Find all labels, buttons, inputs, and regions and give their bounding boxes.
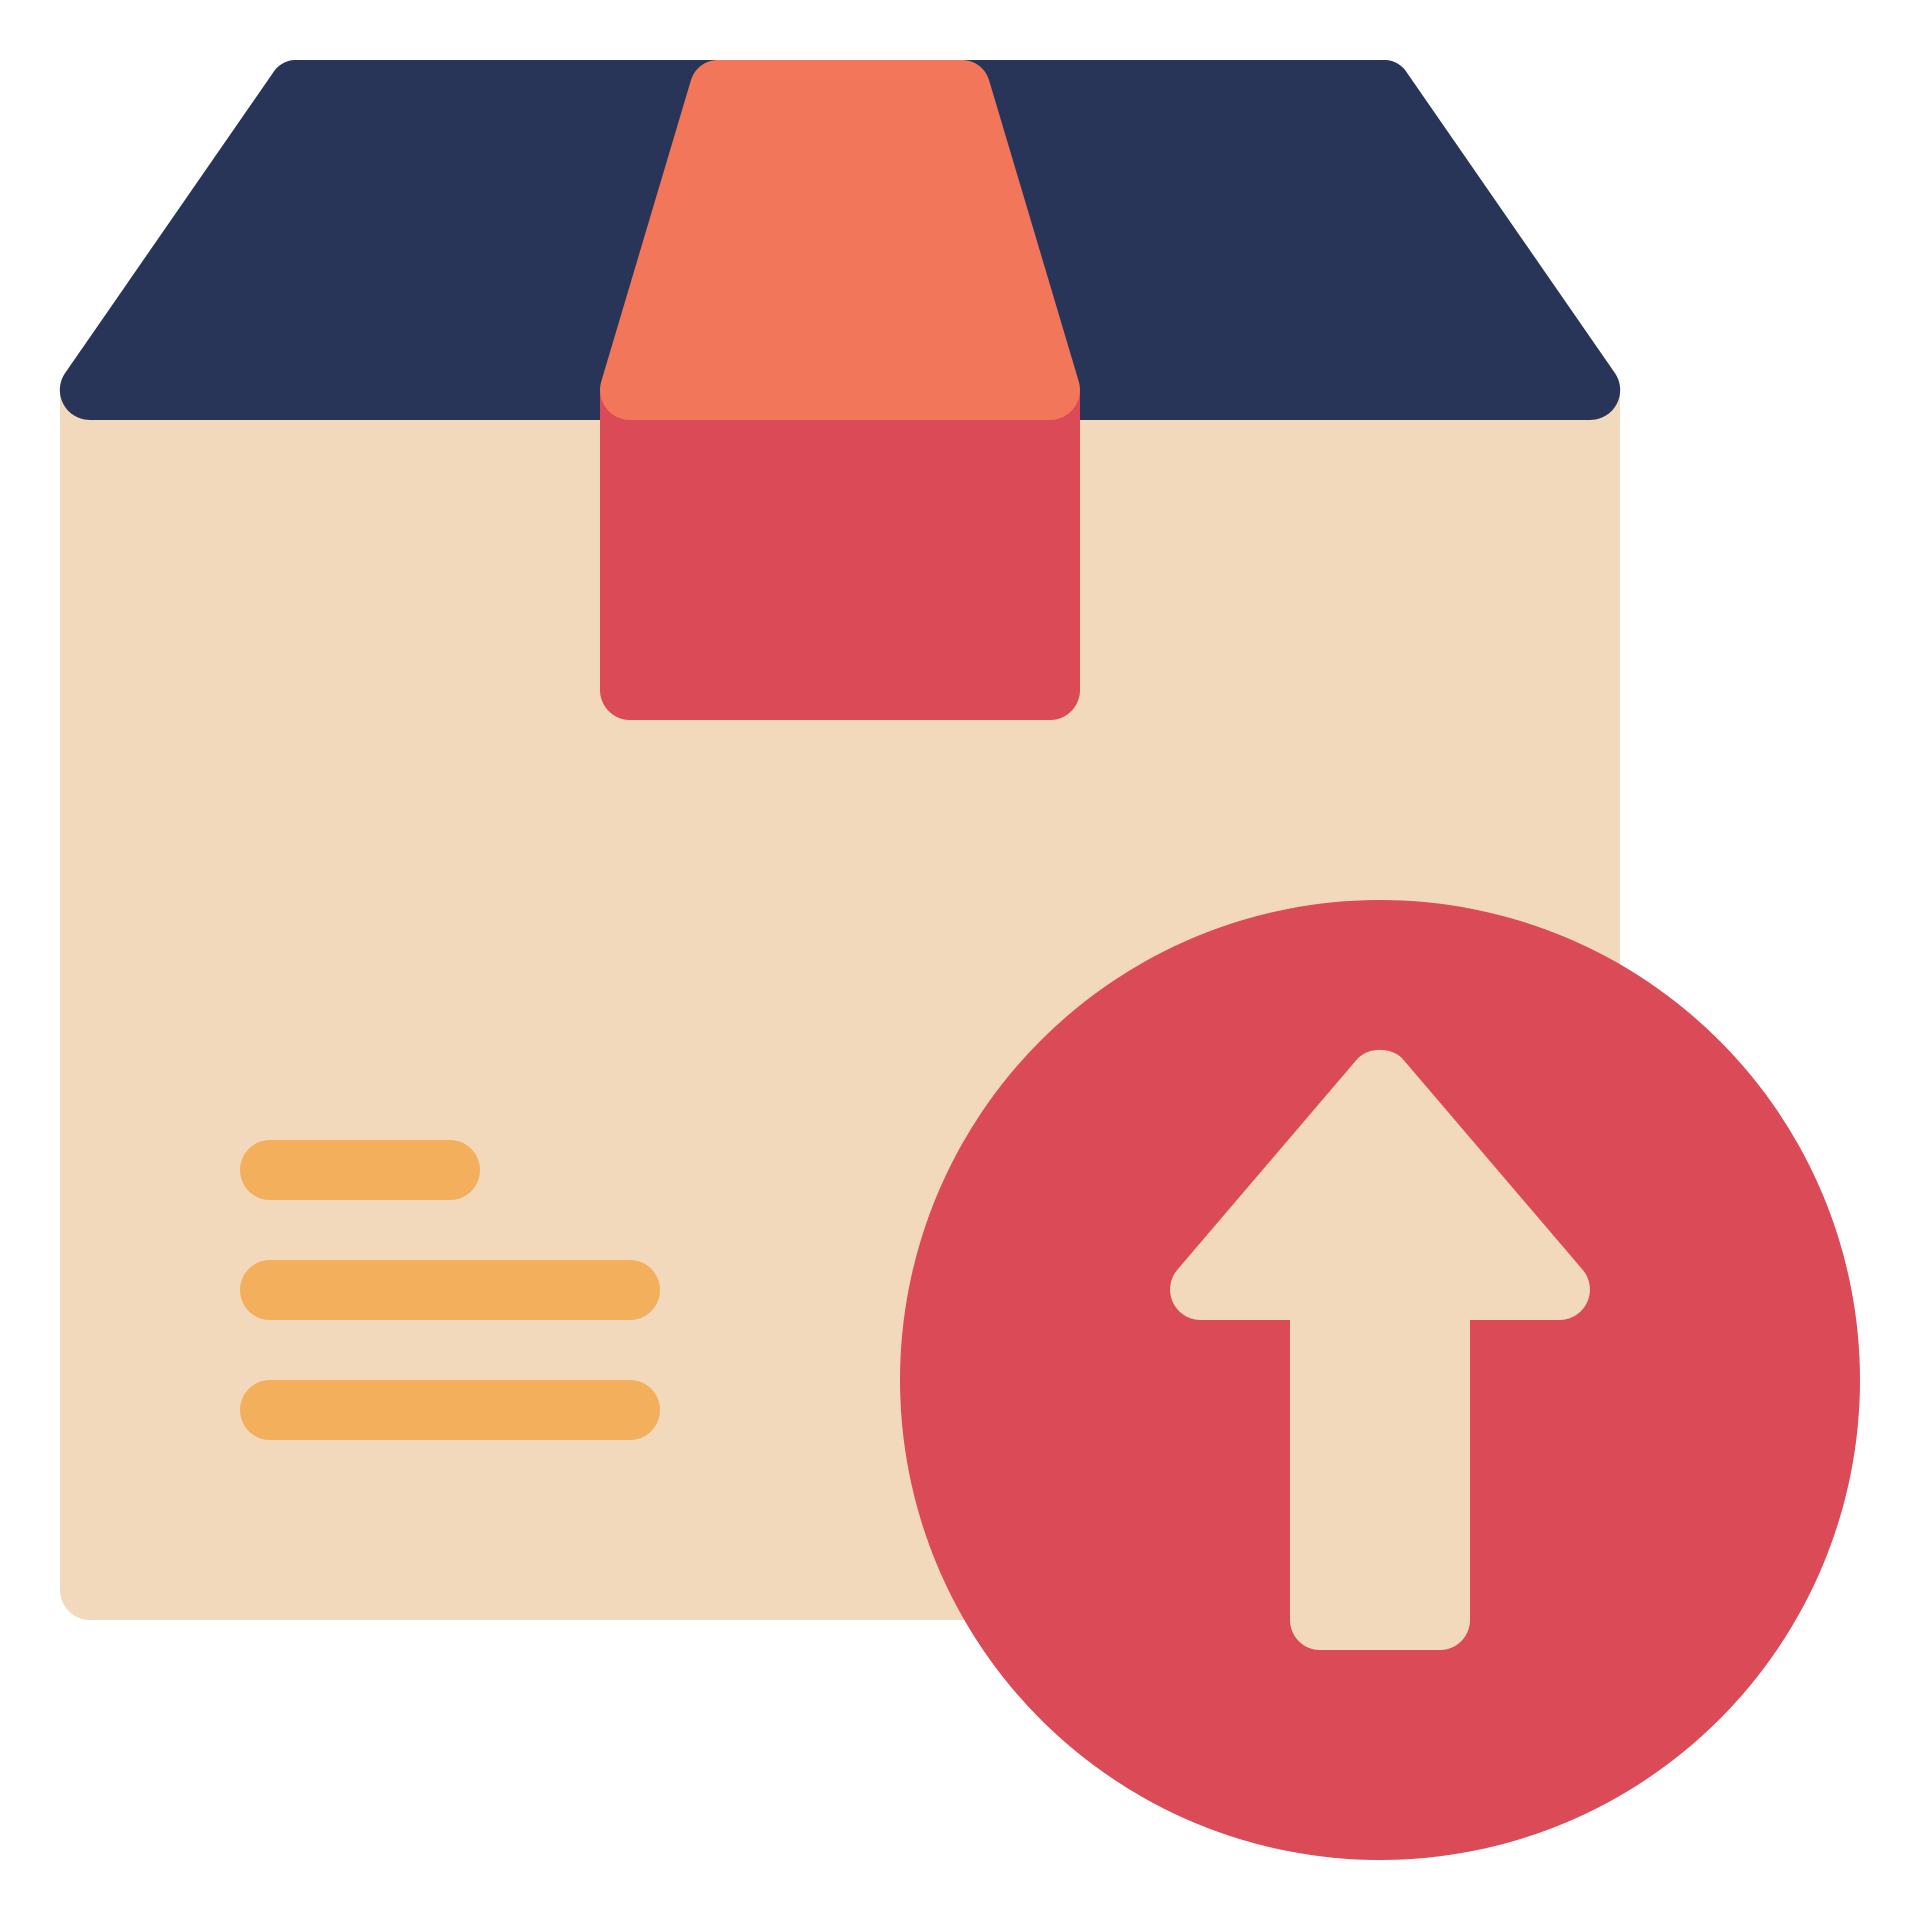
label line 1 bbox=[240, 1140, 480, 1200]
upload badge circle bbox=[900, 900, 1860, 1860]
label lines bbox=[240, 1140, 660, 1440]
box body bbox=[60, 390, 1620, 1620]
label line 3 bbox=[240, 1380, 660, 1440]
label line 2 bbox=[240, 1260, 660, 1320]
icon: up arrow bbox=[1170, 1050, 1590, 1650]
box lid bbox=[60, 60, 1620, 420]
packing tape: front strip bbox=[600, 390, 1080, 720]
packing tape: lid strip bbox=[600, 60, 1080, 420]
